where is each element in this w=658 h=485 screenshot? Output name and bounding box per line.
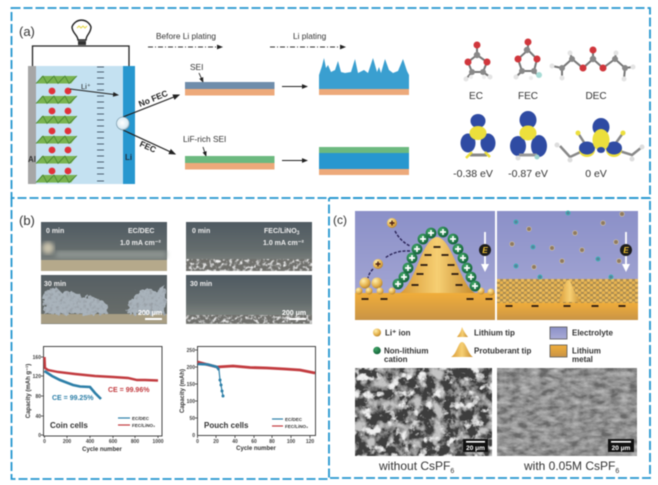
- chart: pouch cells: 50: [189, 416, 195, 422]
- orbital: DEC 0 eV: [554, 118, 644, 180]
- before Li plating header: Before Li plating: [156, 31, 216, 41]
- chart: coin cells: 80: [35, 394, 41, 400]
- orbital: EC -0.38 eV: -0.38 eV: [453, 168, 493, 180]
- chart: pouch cells: 60: [251, 439, 257, 445]
- molecule: EC: [464, 42, 492, 102]
- caption: without CsPF6: without CsPF: [379, 459, 450, 473]
- legend: cation: [384, 355, 408, 364]
- caption: without CsPF6: 6: [450, 468, 454, 475]
- legend: Non-lithium: [384, 346, 428, 356]
- chart: coin cells: CE = 99.96%: [108, 387, 150, 394]
- photo: EC/DEC 30 min: 200 μm: [138, 310, 162, 317]
- chart: coin cells: 40: [35, 414, 41, 420]
- circuit wire: [32, 46, 129, 67]
- chart: coin cells: Capacity (mAh g⁻¹): [25, 364, 32, 418]
- legend: Protuberant tip: [474, 346, 531, 356]
- SEI layer stack: SEI: [190, 62, 203, 72]
- molecule: EC: EC: [469, 91, 483, 102]
- legend: metal: [572, 355, 593, 364]
- dendritic Li growth: [319, 58, 409, 95]
- icon: light bulb: [72, 20, 91, 45]
- chart: coin cells: 600: [109, 439, 117, 445]
- chart: coin cells: CE = 99.25%: [52, 395, 94, 402]
- panel: (c) CsPF6 electrostatic shield: [329, 198, 650, 478]
- legend: Electrolyte: [572, 328, 613, 338]
- chart: coin cells: 800: [131, 439, 139, 445]
- Li plating header: Li plating: [293, 31, 327, 41]
- scene: with shield: [497, 211, 638, 320]
- LiF-rich SEI layer stack: [183, 134, 274, 170]
- chart: pouch cells: 250: [187, 348, 195, 354]
- chart: coin cells: Coin cells: [50, 421, 88, 430]
- chart: pouch cells: 100: [187, 399, 195, 405]
- chart: pouch cells: Pouch cells: [204, 421, 249, 430]
- photo: EC/DEC 30 min: 30 min: [44, 281, 66, 288]
- chart: pouch cells: 20: [213, 439, 219, 445]
- chart: coin cells: 200: [63, 439, 71, 445]
- orbital: EC -0.38 eV: [453, 114, 496, 180]
- legend: Lithium tip: [474, 328, 515, 338]
- label (b): (b): [19, 213, 35, 228]
- molecule: FEC: FEC: [518, 91, 538, 102]
- photo: FEC/LiNO3 0 min: 0 min: [192, 228, 210, 235]
- SEM image: without CsPF6: 20 μm: [466, 445, 485, 452]
- chart: pouch cells: 200: [187, 365, 195, 371]
- molecule: DEC: [550, 46, 636, 102]
- photo: EC/DEC 0 min: EC/DEC: [128, 228, 154, 235]
- legend: Li⁺ ion: [385, 328, 411, 338]
- legend: [373, 327, 613, 364]
- chart: pouch cells: 120: [306, 439, 314, 445]
- arrows to plated state: [282, 86, 307, 160]
- no FEC and FEC arrows: No FEC: [137, 88, 169, 109]
- photo: FEC/LiNO3 0 min: 3: [297, 230, 300, 236]
- legend: Lithium: [572, 346, 601, 356]
- label (c): (c): [333, 213, 347, 227]
- chart: pouch cells: 80: [269, 439, 275, 445]
- chart: coin cells: 400: [86, 439, 94, 445]
- battery cell: Li⁺: [81, 82, 91, 91]
- chart: pouch cells: 40: [232, 439, 238, 445]
- chart: coin cells: 160: [33, 355, 41, 361]
- scene: without shield: [355, 211, 495, 320]
- chart: coin cells: [25, 346, 164, 453]
- chart: coin cells: 0: [43, 439, 46, 445]
- chart: pouch cells: EC/DEC: [285, 417, 303, 422]
- photo: FEC/LiNO3 30 min: 30 min: [190, 281, 212, 288]
- photo: FEC/LiNO3 30 min: [186, 275, 312, 324]
- orbital: DEC 0 eV: 0 eV: [585, 168, 607, 180]
- label (a): (a): [19, 24, 35, 39]
- LiF-rich SEI layer stack: LiF-rich SEI: [183, 134, 226, 144]
- SEI layer stack: [185, 62, 274, 96]
- chart: coin cells: 120: [33, 374, 41, 380]
- scene: with shield: E: [623, 246, 629, 255]
- orbital: FEC -0.87 eV: -0.87 eV: [508, 168, 548, 180]
- chart: coin cells: EC/DEC: [132, 416, 150, 421]
- SEM image: with 0.05M CsPF6: [497, 368, 637, 456]
- chart: pouch cells: 0: [192, 433, 195, 439]
- panel: (a) Li plating mechanism: [12, 8, 650, 198]
- chart: coin cells: 0: [38, 433, 41, 439]
- orbital: FEC -0.87 eV: [508, 111, 548, 180]
- SEM image: with 0.05M CsPF6: 20 μm: [612, 445, 631, 452]
- photo: FEC/LiNO3 30 min: 200 μm: [282, 310, 306, 317]
- photo: EC/DEC 0 min: [41, 222, 167, 271]
- chart: pouch cells: [180, 346, 316, 452]
- SEM image: without CsPF6: [355, 368, 492, 456]
- chart: pouch cells: Capacity (mAh): [180, 369, 186, 413]
- chart: pouch cells: 100: [287, 439, 295, 445]
- chart: pouch cells: FEC/LiNO₃: [285, 424, 308, 429]
- before Li plating header: [148, 31, 222, 47]
- chart: pouch cells: 150: [187, 382, 195, 388]
- battery cell: [28, 66, 135, 184]
- photo: EC/DEC 30 min: [41, 275, 167, 324]
- chart: coin cells: FEC/LiNO₃: [132, 423, 155, 428]
- photo: FEC/LiNO3 0 min: [186, 222, 312, 271]
- chart: pouch cells: Cycle number: [236, 446, 277, 452]
- Li plating header: [270, 31, 345, 47]
- chart: coin cells: 1000: [152, 439, 164, 445]
- molecule: DEC: DEC: [585, 91, 607, 102]
- scene: without shield: E: [482, 246, 488, 255]
- uniform Li growth: [319, 147, 409, 175]
- panel: (b) in situ imaging and cycling: [12, 198, 329, 479]
- battery cell: Al: [28, 155, 36, 164]
- molecule: FEC: [514, 38, 542, 102]
- chart: coin cells: Cycle number: [82, 447, 123, 453]
- photo: FEC/LiNO3 0 min: FEC/LiNO: [264, 228, 297, 235]
- photo: FEC/LiNO3 0 min: 1.0 mA cm⁻²: [263, 240, 304, 247]
- chart: pouch cells: 0: [196, 439, 199, 445]
- no FEC and FEC arrows: [116, 88, 179, 155]
- photo: EC/DEC 0 min: 1.0 mA cm⁻²: [120, 240, 161, 247]
- caption: with 0.05M CsPF6: 6: [615, 468, 619, 475]
- photo: EC/DEC 0 min: 0 min: [46, 228, 64, 235]
- no FEC and FEC arrows: FEC: [138, 139, 158, 155]
- battery cell: Li: [125, 153, 132, 162]
- caption: with 0.05M CsPF6: with 0.05M CsPF: [524, 459, 615, 473]
